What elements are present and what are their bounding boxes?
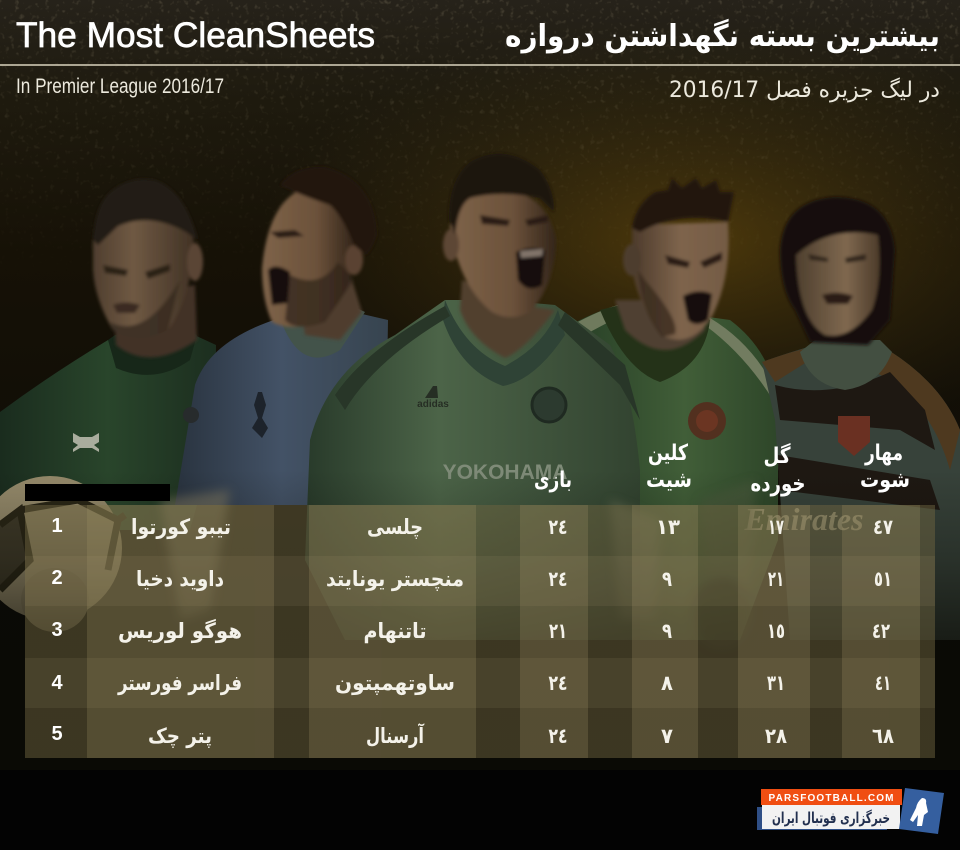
icon: adidas logo: adidas	[417, 399, 449, 410]
table row 1	[51, 515, 893, 539]
parsfootball logo	[757, 788, 944, 834]
table row 1: ١٧	[768, 515, 784, 539]
divider	[0, 64, 960, 66]
table row 5: آرسنال	[366, 723, 425, 748]
table row 3: هوگو لوریس	[118, 618, 242, 643]
football and glove	[0, 476, 125, 632]
arms and gloves ghosted under table	[160, 480, 755, 648]
title english: The Most CleanSheets	[16, 16, 375, 55]
table row 2: 2	[51, 567, 63, 589]
table row 5	[51, 723, 894, 748]
icon: manchester united crest	[688, 402, 726, 440]
player: Hugo Lloris	[175, 167, 388, 505]
table row 5: 5	[51, 723, 63, 745]
table row 4: ٨	[661, 671, 673, 695]
player: Petr Cech	[743, 197, 960, 640]
table row 1: ٤٧	[873, 515, 893, 539]
header: clean sheets top: کلین	[648, 441, 688, 466]
header: games: بازی	[534, 468, 572, 493]
bottom fade	[0, 470, 960, 770]
parsfootball logo: PARSFOOTBALL.COM	[768, 793, 894, 804]
table row 4: 4	[51, 672, 63, 694]
player: Thibaut Courtois	[305, 154, 640, 640]
table row 1: ١٣	[656, 515, 680, 539]
icon: tottenham crest	[252, 392, 268, 438]
player: David de Gea	[570, 178, 778, 640]
table header	[534, 441, 910, 497]
table row 2: ٢١	[768, 567, 784, 591]
table row 5: ٢٨	[765, 724, 787, 748]
redacted black bar	[25, 484, 170, 501]
table row 3: تاتنهام	[364, 619, 426, 643]
table row 4: فراسر فورستر	[117, 671, 242, 695]
background	[0, 0, 960, 505]
table row 2: ٩	[662, 567, 672, 591]
table row 5: ٢٤	[548, 724, 568, 748]
subtitle english: In Premier League 2016/17	[16, 75, 224, 98]
table row 3: ١٥	[767, 619, 785, 643]
table row 2: ٢٤	[548, 567, 568, 591]
icon: premier league sleeve badge	[183, 407, 199, 423]
table row 3: 3	[51, 619, 63, 641]
table row 2: داوید دخیا	[136, 567, 224, 591]
header: clean sheets bottom: شیت	[646, 468, 692, 493]
table row 1: تیبو کورتوا	[131, 515, 231, 539]
table row 5: ٧	[661, 724, 673, 748]
table row 2: ٥١	[874, 567, 892, 591]
table row 4: ٣١	[767, 671, 785, 695]
table row 1: چلسی	[367, 515, 423, 539]
table row 3: ٤٢	[872, 619, 890, 643]
parsfootball logo: خبرگزاری فوتبال ایران	[772, 809, 890, 827]
table row 4: ساوتهمپتون	[335, 671, 455, 695]
icon: arsenal crest	[838, 416, 870, 456]
icon: under armour logo	[73, 433, 99, 452]
table row 3	[51, 618, 890, 643]
header: goals top: گل	[764, 442, 791, 469]
icon: footballer silhouette	[910, 798, 928, 826]
sponsor: yokohama: YOKOHAMA	[443, 461, 567, 484]
table row 5: ٦٨	[872, 724, 894, 748]
black band	[0, 770, 960, 850]
table row 4	[51, 671, 891, 695]
title persian: بیشترین بسته نگهداشتن دروازه	[505, 18, 940, 54]
icon: chelsea crest	[532, 388, 566, 422]
table row 3: ٢١	[549, 619, 567, 643]
table row 4: ٢٤	[548, 671, 568, 695]
player: Fraser Forster	[0, 179, 216, 530]
icon: adidas logo	[417, 386, 449, 410]
table row 1: ٢٤	[548, 515, 568, 539]
header: saves top: مهار	[864, 441, 903, 466]
table row 1: 1	[51, 515, 63, 537]
header: saves bottom: شوت	[860, 468, 910, 493]
subtitle persian: در لیگ جزیره فصل 2016/17	[669, 77, 940, 103]
sponsor: emirates: Emirates	[743, 501, 864, 537]
table row 2: منچستر یونایتد	[326, 567, 464, 591]
header: goals bottom: خورده	[750, 472, 806, 497]
stats table background	[25, 505, 935, 758]
table row 3: ٩	[662, 619, 672, 643]
table row 5: پتر چک	[148, 724, 212, 748]
table row 2	[51, 567, 892, 591]
table row 4: ٤١	[875, 671, 891, 695]
